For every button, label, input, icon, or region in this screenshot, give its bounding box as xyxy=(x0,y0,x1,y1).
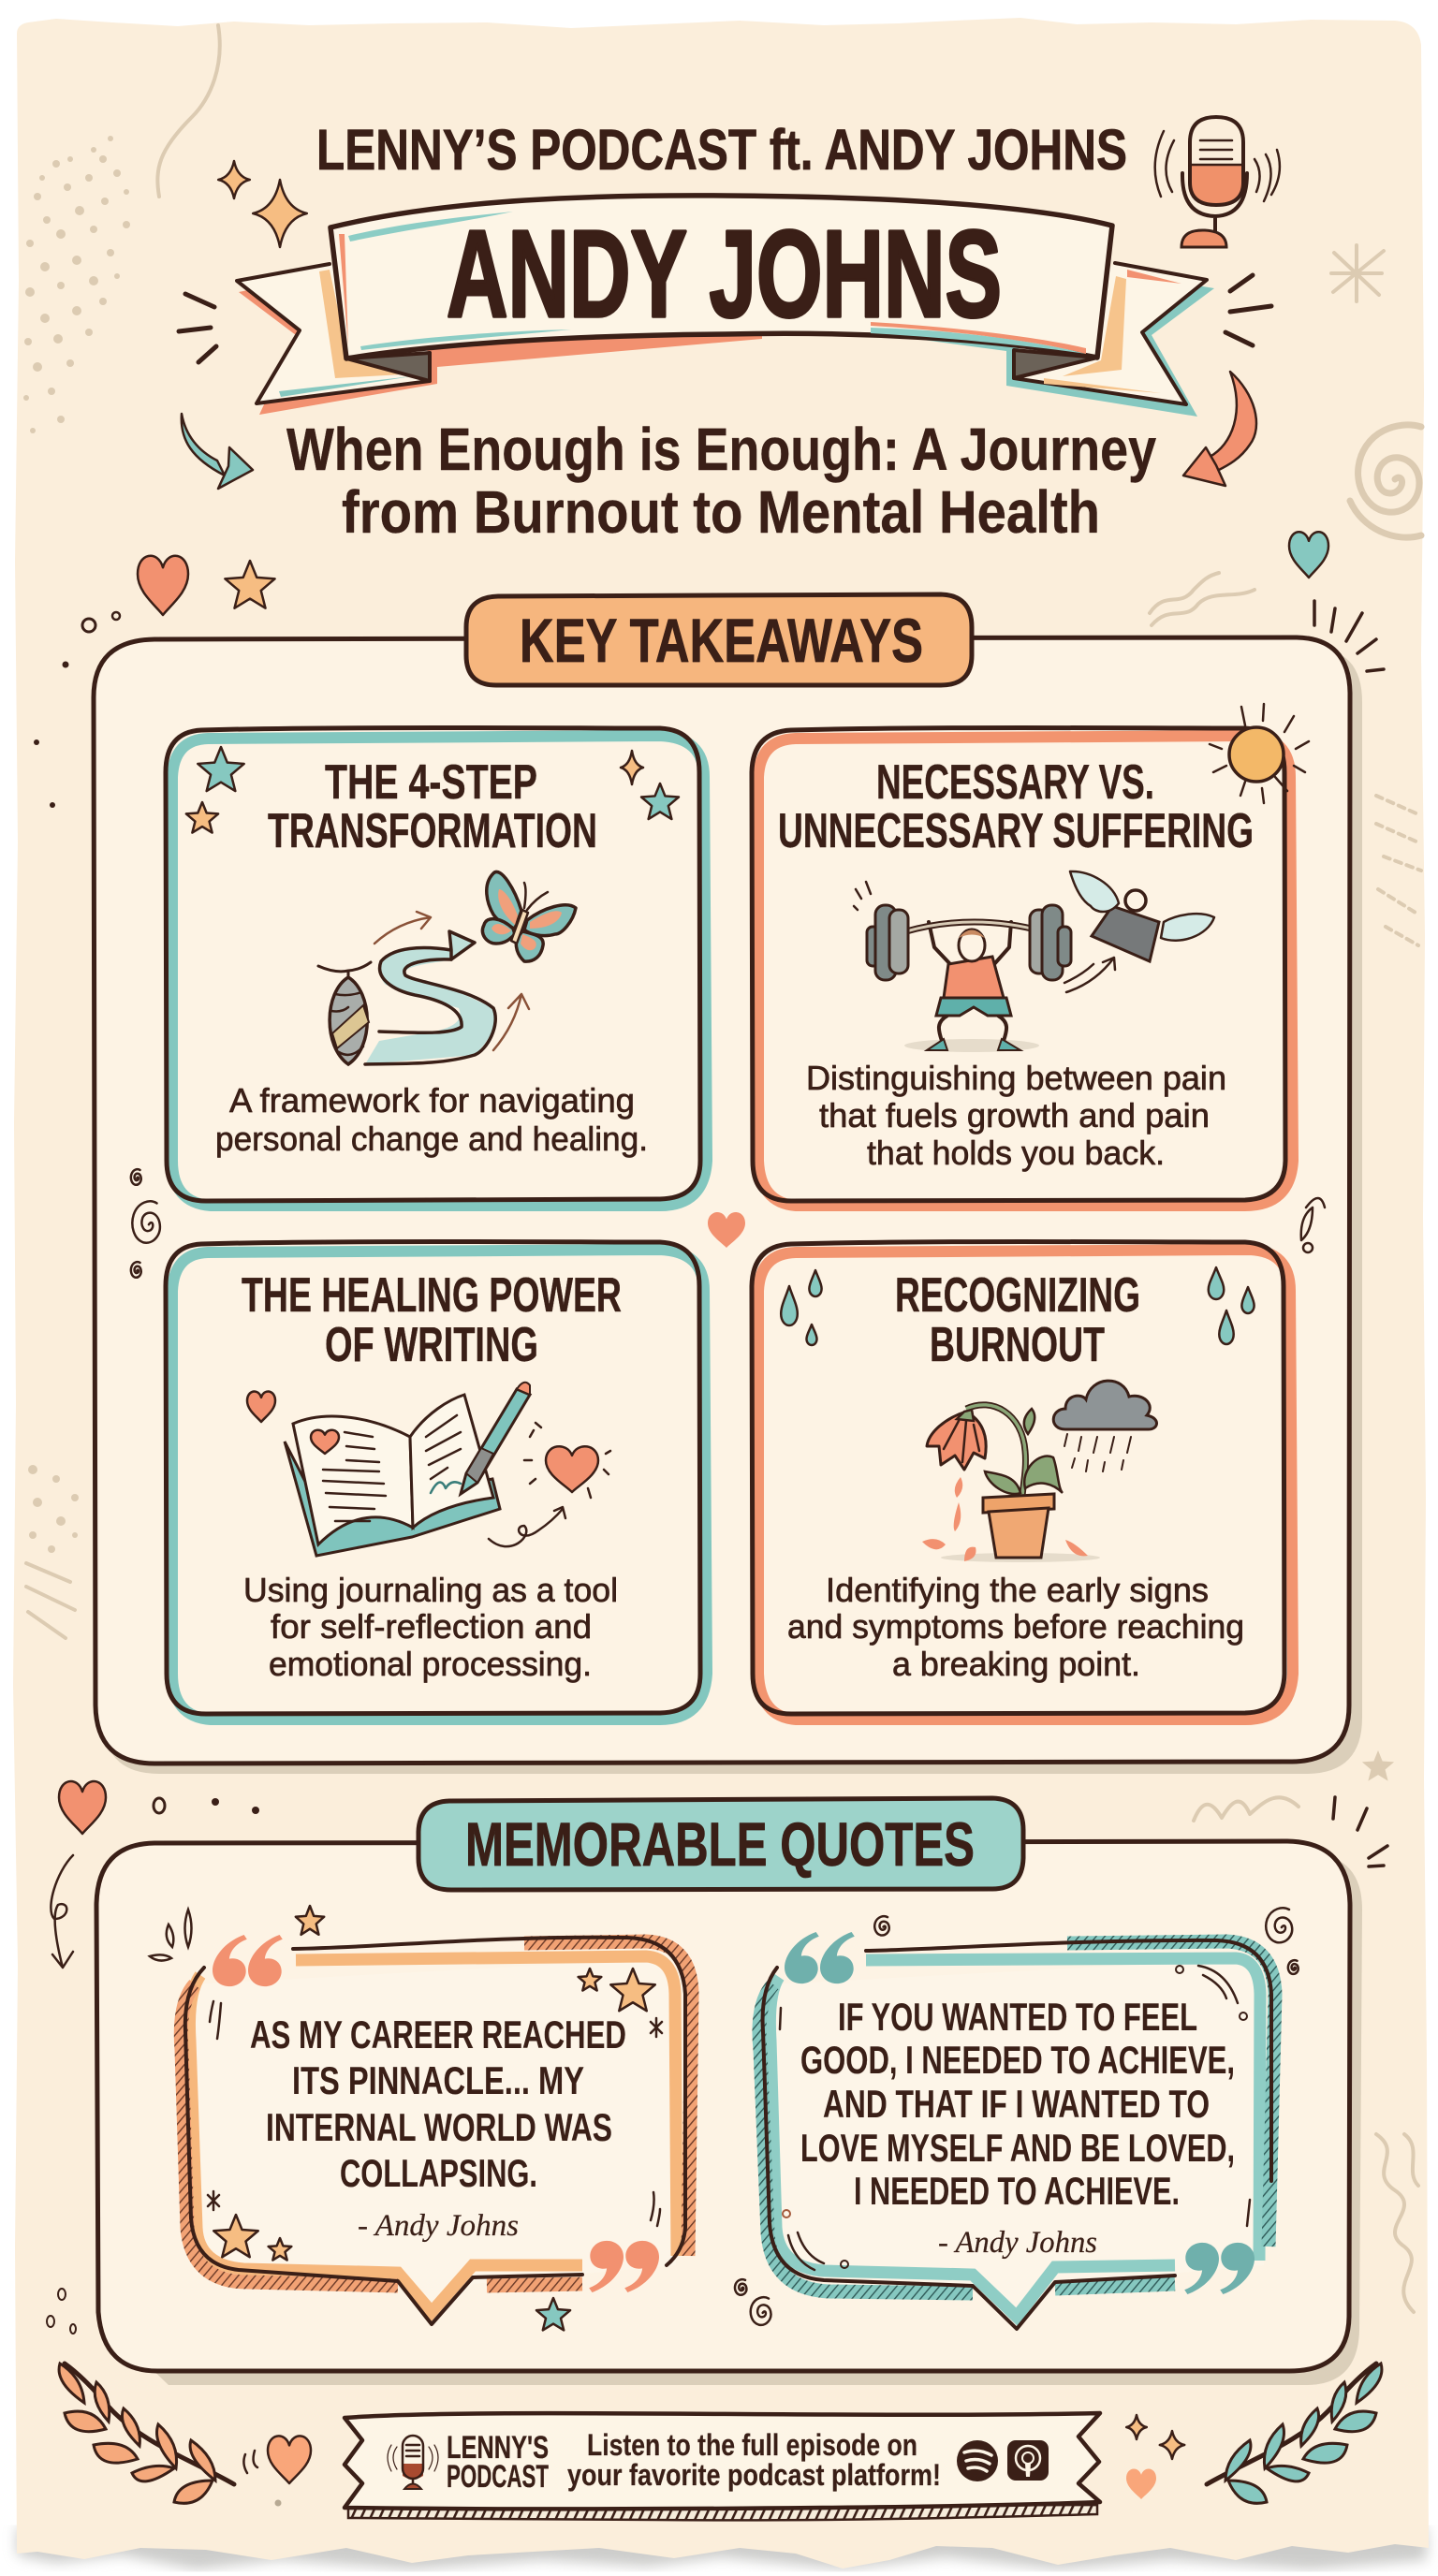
doodles above quotes xyxy=(51,1750,1394,1968)
tan scribbles right xyxy=(1376,796,1421,945)
icons: upper hearts and star xyxy=(34,532,1384,808)
footer banner: PODCAST xyxy=(447,2459,549,2495)
tan dot field xyxy=(23,136,130,1553)
card text: A framework for navigating xyxy=(229,1081,635,1120)
icon: weightlifter and winged weight xyxy=(854,871,1214,1052)
bubble colour bands xyxy=(772,1958,1264,2329)
key takeaways label xyxy=(466,594,972,685)
closing quote mark xyxy=(589,2241,659,2292)
tan curve top left xyxy=(157,25,220,197)
footer banner: your favorite podcast platform! xyxy=(567,2458,941,2492)
stars xyxy=(186,747,679,833)
quote 2 doodles xyxy=(735,1908,1299,2325)
subtitle: from Burnout to Mental Health xyxy=(342,478,1100,546)
icon: streaming logo xyxy=(957,2440,998,2481)
quote text: IF YOU WANTED TO FEEL xyxy=(838,1995,1197,2039)
icon: sparkles xyxy=(218,161,307,247)
decoration: left dots xyxy=(47,2289,281,2507)
panel frame xyxy=(96,1841,1350,2371)
card: recognizing burnout: BURNOUT xyxy=(930,1318,1105,1372)
quote attribution: - Andy Johns xyxy=(938,2226,1097,2260)
panel frame xyxy=(94,637,1350,1764)
card: healing power of writing xyxy=(166,1241,707,1720)
card title: NECESSARY VS. xyxy=(876,755,1154,810)
title banner xyxy=(237,196,1214,417)
banner colour shadows xyxy=(239,273,762,415)
banner body xyxy=(345,2413,1100,2509)
panel: key takeaways xyxy=(94,594,1362,1774)
bubble outline xyxy=(763,1940,1271,2329)
icon: podcasts logo xyxy=(1007,2440,1049,2481)
card title: THE 4-STEP xyxy=(325,755,537,810)
burst lines left xyxy=(179,294,216,362)
bubble outline xyxy=(185,1938,685,2324)
heading: podcast line: LENNY’S PODCAST ft. ANDY JOHNS xyxy=(316,118,1127,182)
quote 2: I NEEDED TO ACHIEVE. xyxy=(854,2169,1180,2213)
opening quote mark xyxy=(213,1935,283,1986)
card: 4-step transformation: TRANSFORMATION xyxy=(268,804,597,858)
icon: wilting plant and rain cloud xyxy=(922,1381,1157,1562)
icon: sun xyxy=(1210,704,1309,803)
arrow: teal curved xyxy=(182,414,253,489)
subtitle: When Enough is Enough: A Journey xyxy=(286,416,1156,483)
centre washes xyxy=(348,212,1086,354)
footer logo text: LENNY'S xyxy=(447,2430,549,2466)
quote 2 xyxy=(735,1908,1299,2329)
ribbon folds xyxy=(346,353,430,381)
quote 2: LOVE MYSELF AND BE LOVED, xyxy=(800,2126,1235,2170)
subtitle xyxy=(286,416,1156,546)
ribbon centre xyxy=(330,196,1112,359)
quote 2: GOOD, I NEEDED TO ACHIEVE, xyxy=(800,2038,1235,2082)
panel shadow xyxy=(122,1853,1362,2385)
panel shadow xyxy=(103,648,1362,1774)
tan scribbles left xyxy=(26,1563,75,1638)
tan wave column xyxy=(1376,2134,1418,2312)
tan squiggle xyxy=(1150,573,1255,625)
card: 4-step transformation: personal change and healing. xyxy=(215,1120,648,1158)
card: recognizing burnout: a breaking point. xyxy=(892,1645,1140,1683)
card: necessary vs unnecessary suffering: UNNECESSARY SUFFERING xyxy=(778,804,1254,858)
panel: memorable quotes xyxy=(96,1798,1362,2385)
bubble colour bands xyxy=(193,1958,676,2324)
card: recognizing burnout xyxy=(752,1241,1293,1720)
card: necessary vs unnecessary suffering: that fuels growth and pain xyxy=(819,1096,1210,1134)
footer hearts and sparkles xyxy=(243,2415,1184,2499)
left tail xyxy=(237,264,430,403)
raindrops xyxy=(781,1267,1255,1345)
tan spiral xyxy=(1350,425,1421,537)
footer banner xyxy=(345,2413,1100,2520)
quote 1: COLLAPSING. xyxy=(340,2151,537,2195)
card: recognizing burnout: and symptoms before reaching xyxy=(787,1607,1244,1646)
card title: RECOGNIZING xyxy=(895,1268,1140,1323)
doodles between cards xyxy=(131,1169,1325,1278)
card: healing power of writing: OF WRITING xyxy=(325,1318,538,1372)
opening quote mark xyxy=(785,1932,855,1983)
leaf sprig left xyxy=(59,2364,234,2503)
paper shadow xyxy=(17,2527,1427,2569)
arrow: coral curved xyxy=(1183,372,1256,486)
card: healing power of writing: for self-reflection and xyxy=(271,1607,592,1646)
icon: journal with pen and heart xyxy=(247,1383,610,1556)
burst lines right xyxy=(1225,275,1271,345)
footer message: Listen to the full episode on xyxy=(587,2428,917,2462)
quote 1 xyxy=(150,1906,692,2330)
banner hatch xyxy=(348,2505,1097,2520)
icon: footer microphone xyxy=(388,2436,438,2489)
card: necessary vs unnecessary suffering xyxy=(752,704,1309,1206)
quote text: AS MY CAREER REACHED xyxy=(250,2012,626,2056)
quote 2: AND THAT IF I WANTED TO xyxy=(823,2082,1210,2126)
card frame xyxy=(166,1241,700,1714)
card text: Distinguishing between pain xyxy=(806,1059,1226,1097)
card frame xyxy=(752,1241,1284,1714)
icon: cocoon to butterfly xyxy=(318,871,576,1064)
memorable quotes label xyxy=(418,1798,1023,1890)
card: healing power of writing: emotional processing. xyxy=(269,1645,592,1683)
tan squiggle lower right xyxy=(1194,1797,1299,1821)
quote 1: INTERNAL WORLD WAS xyxy=(266,2105,612,2149)
title: ANDY JOHNS xyxy=(447,205,1002,343)
card title: THE HEALING POWER xyxy=(242,1268,622,1323)
quote 1 doodles xyxy=(150,1906,662,2330)
memorable quotes label: MEMORABLE QUOTES xyxy=(465,1809,975,1879)
leaf sprig right xyxy=(1207,2364,1382,2503)
card frame xyxy=(166,728,700,1201)
quote 1: ITS PINNACLE... MY xyxy=(292,2058,584,2102)
card: 4-step transformation xyxy=(166,728,707,1206)
tan asterisk xyxy=(1331,245,1384,301)
closing quote mark xyxy=(1184,2243,1255,2294)
card text: Identifying the early signs xyxy=(826,1571,1209,1609)
card: necessary vs unnecessary suffering: that holds you back. xyxy=(867,1134,1165,1172)
card text: Using journaling as a tool xyxy=(243,1571,618,1609)
tail washes xyxy=(319,270,403,378)
quote attribution: - Andy Johns xyxy=(358,2209,519,2243)
icon: microphone xyxy=(1155,117,1280,247)
key takeaways label: KEY TAKEAWAYS xyxy=(520,606,923,675)
card frame xyxy=(752,728,1285,1201)
right tail xyxy=(1014,263,1207,404)
